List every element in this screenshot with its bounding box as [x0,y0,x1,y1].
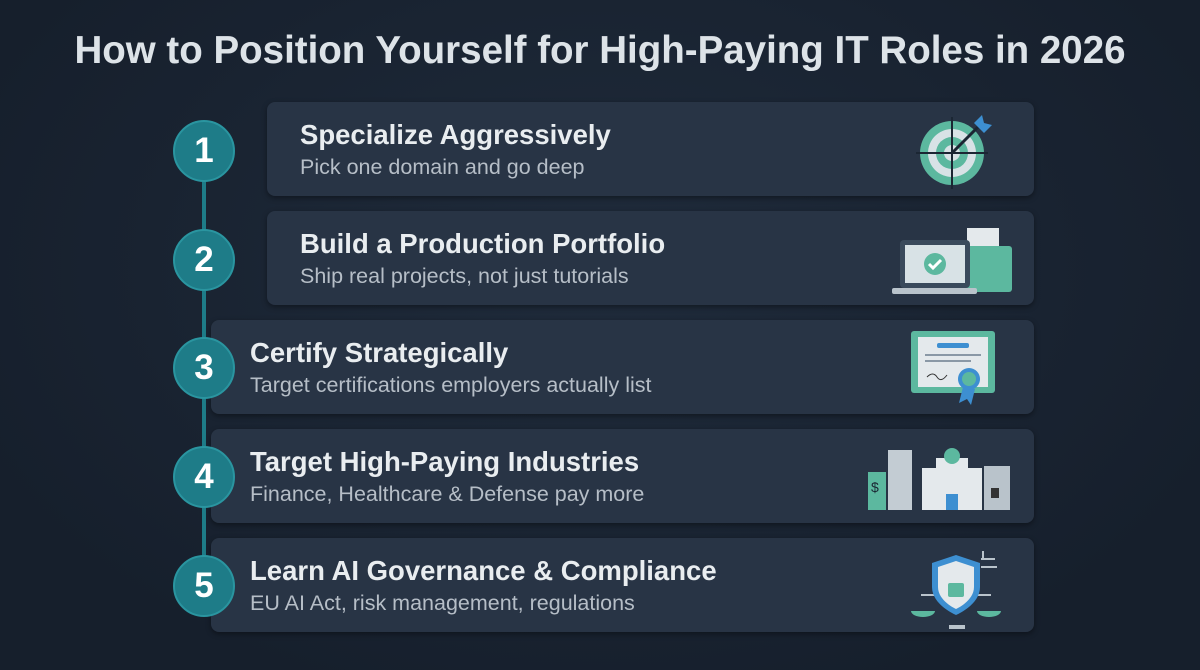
step circles [173,120,235,617]
icon: laptop and folder [892,228,1012,294]
card 3: Target certifications employers actually list [250,373,652,397]
icon: buildings: $ [871,479,879,495]
card 4: Finance, Healthcare & Defense pay more [250,482,644,506]
timeline line [202,151,206,586]
circle 5: 5 [194,566,214,605]
card 2 [267,211,1034,305]
icon: target [916,115,992,189]
card 2: Build a Production Portfolio [300,228,665,259]
circle 2 [173,229,235,291]
circle 3: 3 [194,348,214,387]
card 5 [211,538,1034,632]
circle 1 [173,120,235,182]
card 5: Learn AI Governance & Compliance [250,555,717,586]
circle 2: 2 [194,240,214,279]
circle 5 [173,555,235,617]
icon: certificate [911,331,995,405]
card 4: Target High-Paying Industries [250,446,639,477]
circle 3 [173,337,235,399]
circle 1: 1 [194,131,214,170]
card 4 [211,429,1034,523]
title: How to Position Yourself for High-Paying IT Roles in 2026 [74,29,1126,72]
card 3: Certify Strategically [250,337,508,368]
card 5: EU AI Act, risk management, regulations [250,591,635,615]
icon: shield and scales [911,551,1001,629]
card 3 [211,320,1034,414]
circle 4: 4 [194,457,214,496]
circle 4 [173,446,235,508]
card 1 [267,102,1034,196]
card 1: Specialize Aggressively [300,119,611,150]
card 1: Pick one domain and go deep [300,155,584,179]
card 2: Ship real projects, not just tutorials [300,264,629,288]
icon: buildings [868,448,1010,510]
